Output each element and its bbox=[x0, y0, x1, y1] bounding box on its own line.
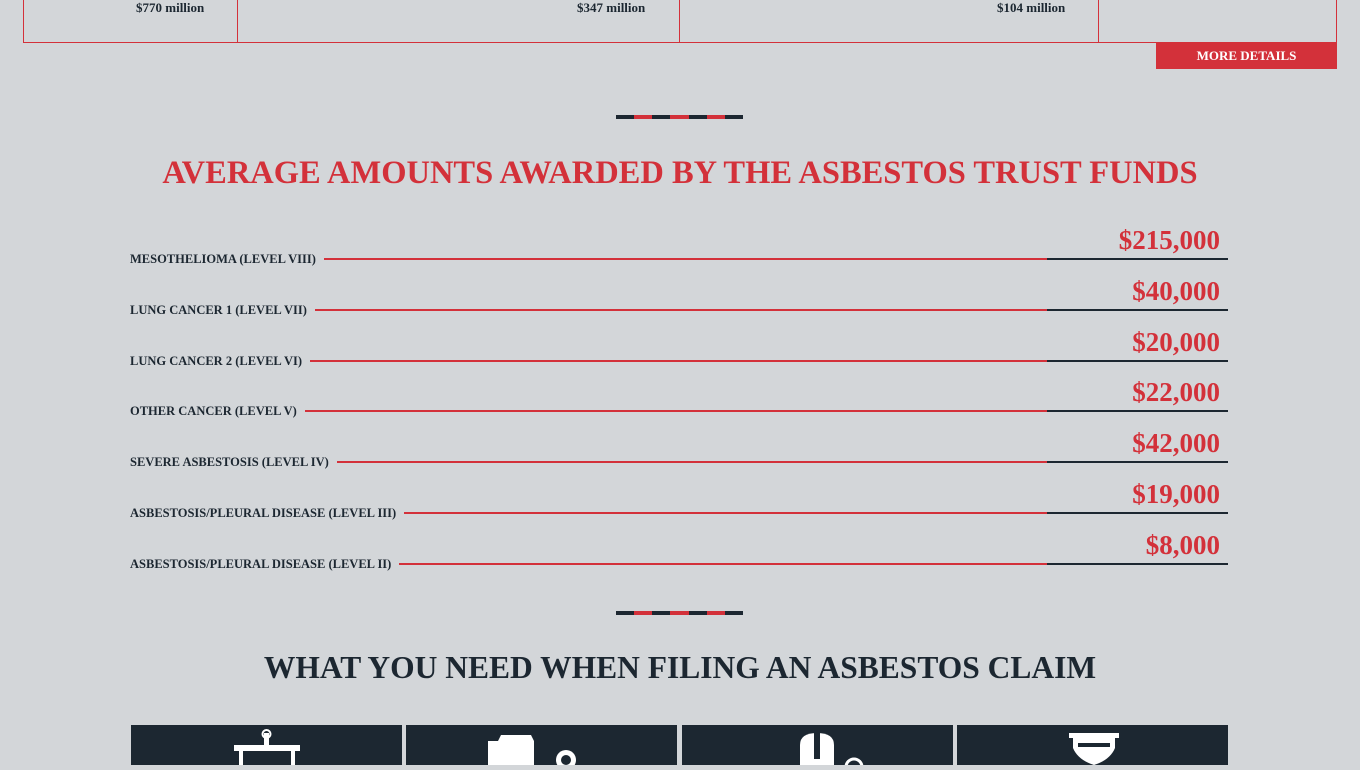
row: level II: $8,000 bbox=[1146, 530, 1220, 560]
row: other cancer: OTHER CANCER (LEVEL V) bbox=[130, 404, 297, 418]
row: severe asbestosis: $42,000 bbox=[1132, 428, 1220, 458]
button: more details bbox=[1156, 42, 1337, 69]
row: other cancer: $22,000 bbox=[1132, 377, 1220, 407]
row: lung cancer 2: $20,000 bbox=[1132, 327, 1220, 357]
panel: top statistics table: $347 million bbox=[577, 0, 645, 15]
row: severe asbestosis: SEVERE ASBESTOSIS (LEVEL IV) bbox=[130, 455, 329, 469]
row: level III bbox=[130, 479, 1228, 520]
row: mesothelioma bbox=[130, 225, 1228, 266]
row: lung cancer 1: LUNG CANCER 1 (LEVEL VII) bbox=[130, 303, 307, 317]
row: lung cancer 2 bbox=[130, 327, 1228, 368]
divider icon bbox=[616, 611, 743, 615]
row: level II: ASBESTOSIS/PLEURAL DISEASE (LEVEL II) bbox=[130, 557, 391, 571]
row: lung cancer 1: $40,000 bbox=[1132, 276, 1220, 306]
panel: hourglass bbox=[957, 725, 1228, 765]
row: lung cancer 1 bbox=[130, 276, 1228, 317]
divider icon bbox=[616, 115, 743, 119]
heading: average amounts: AVERAGE AMOUNTS AWARDED BY THE ASBESTOS TRUST FUNDS bbox=[162, 155, 1198, 191]
heading: what you need: WHAT YOU NEED WHEN FILING AN ASBESTOS CLAIM bbox=[264, 650, 1096, 685]
row: lung cancer 2: LUNG CANCER 2 (LEVEL VI) bbox=[130, 354, 302, 368]
button: more details: MORE DETAILS bbox=[1197, 48, 1296, 63]
row: severe asbestosis bbox=[130, 428, 1228, 469]
panel: worker bbox=[682, 725, 953, 765]
panel: top statistics table: $104 million bbox=[997, 0, 1065, 15]
panel: camera bbox=[406, 725, 677, 765]
row: other cancer bbox=[130, 377, 1228, 418]
chart: award amounts bbox=[130, 225, 1228, 571]
row: level III: $19,000 bbox=[1132, 479, 1220, 509]
row: level II bbox=[130, 530, 1228, 571]
row: level III: ASBESTOSIS/PLEURAL DISEASE (LEVEL III) bbox=[130, 506, 396, 520]
panel: top statistics table bbox=[23, 0, 1337, 43]
row: mesothelioma: MESOTHELIOMA (LEVEL VIII) bbox=[130, 252, 316, 266]
row: mesothelioma: $215,000 bbox=[1119, 225, 1220, 255]
panel: top statistics table: $770 million bbox=[136, 0, 204, 15]
panel: legal bbox=[131, 725, 402, 765]
